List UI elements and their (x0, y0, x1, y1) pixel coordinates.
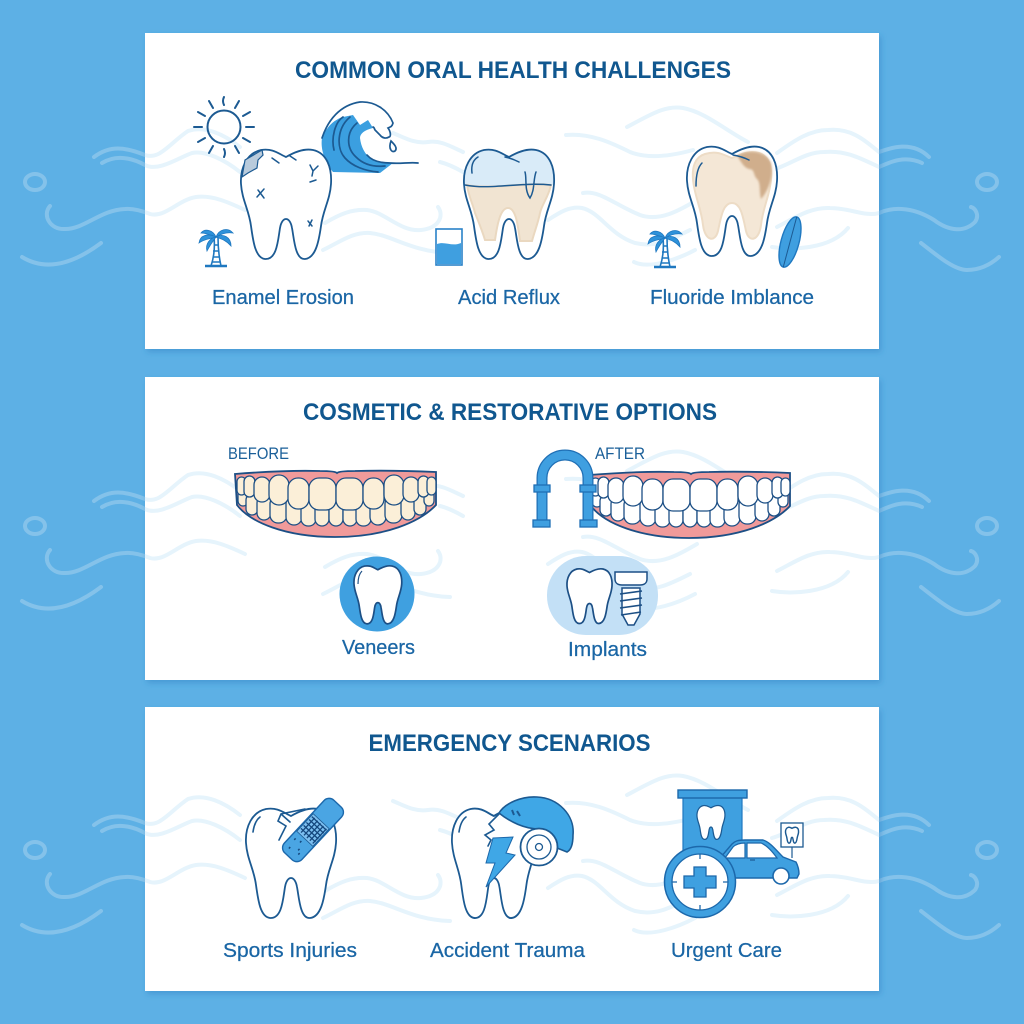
icon: palm tree small (648, 231, 682, 267)
icon: stained tooth (687, 147, 777, 256)
icon: surfboard (775, 215, 805, 269)
icon: dental arch bridge (533, 455, 597, 527)
icon: acid reflux tooth (464, 148, 556, 259)
background wave pattern (22, 107, 999, 938)
icon: sun (194, 97, 254, 157)
icon: ocean wave (322, 102, 418, 173)
illustration: after smile (589, 472, 790, 538)
label: enamel erosion: Enamel Erosion (212, 287, 354, 309)
label: implants: Implants (568, 639, 647, 661)
icon: tooth with helmet and lightning (452, 797, 573, 918)
icon: eroded tooth (241, 150, 331, 259)
icon: urgent care clinic and car (664, 790, 803, 918)
heading: cosmetic and restorative options: COSMETIC & RESTORATIVE OPTIONS (303, 399, 717, 426)
panel: cosmetic and restorative options (144, 377, 884, 684)
panel: emergency scenarios (144, 707, 884, 995)
label: accident trauma: Accident Trauma (430, 940, 586, 962)
icon: tooth with bandage (246, 795, 346, 918)
icon: implants (547, 556, 658, 635)
label: urgent care: Urgent Care (671, 940, 782, 962)
illustration: before smile (235, 471, 436, 537)
icon: palm tree (199, 230, 233, 266)
label: before: BEFORE (228, 445, 289, 463)
label: veneers: Veneers (342, 637, 415, 659)
label: acid reflux: Acid Reflux (458, 287, 560, 309)
icon: glass of water (436, 229, 462, 265)
panel: common oral health challenges (144, 33, 884, 353)
heading: common oral health challenges: COMMON ORAL HEALTH CHALLENGES (295, 57, 731, 84)
label: after: AFTER (595, 445, 645, 463)
heading: emergency scenarios: EMERGENCY SCENARIOS (368, 730, 650, 757)
label: sports injuries: Sports Injuries (223, 940, 357, 962)
icon: veneers tooth in circle (340, 556, 414, 632)
label: fluoride imblance: Fluoride Imblance (650, 287, 814, 309)
